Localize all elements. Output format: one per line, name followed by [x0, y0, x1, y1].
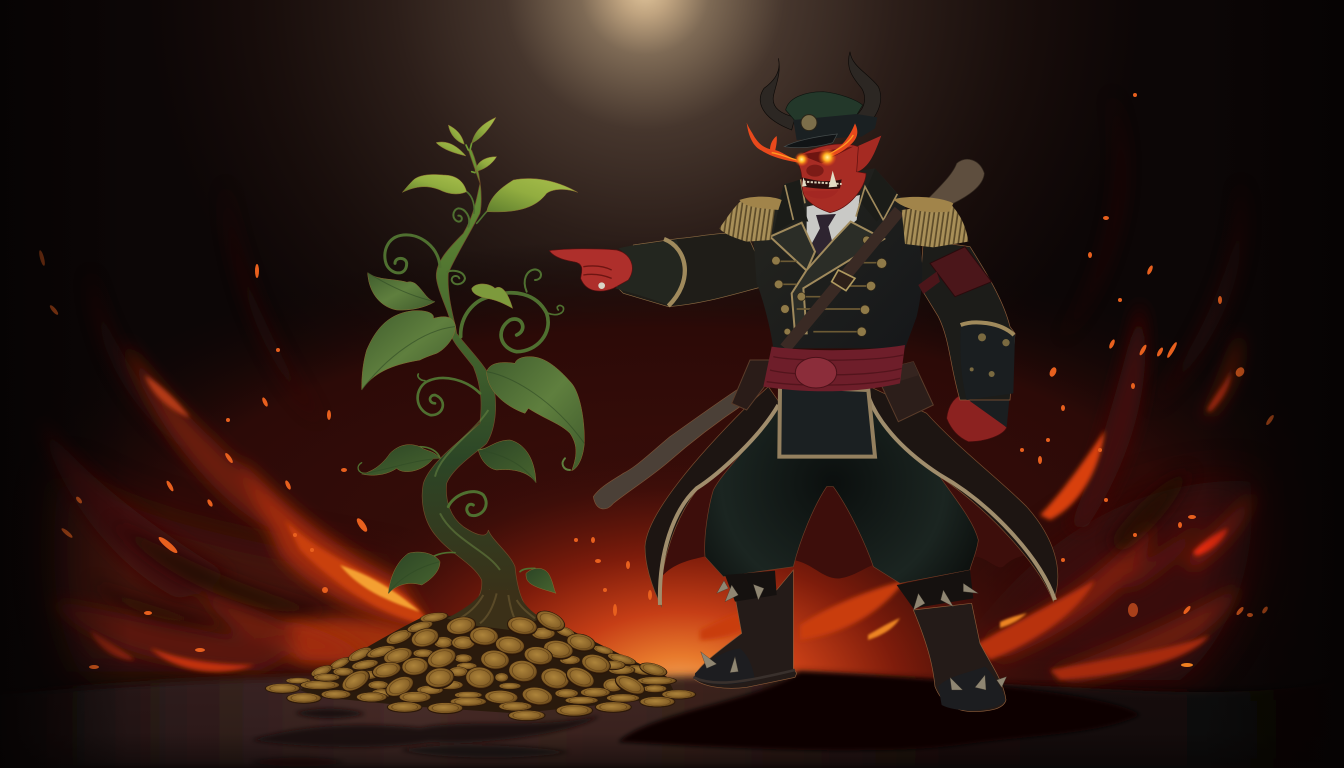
brow shadow	[797, 147, 853, 163]
lapels	[770, 223, 815, 271]
right collar	[862, 168, 898, 222]
plant roots	[447, 590, 542, 630]
lower right leaf	[478, 440, 536, 483]
ground	[0, 672, 1344, 768]
left collar edge	[785, 179, 805, 220]
lower left leaf	[362, 445, 440, 475]
baggy trousers	[705, 407, 978, 583]
cuff trim	[664, 239, 685, 306]
top left leaf	[402, 175, 467, 194]
sprout leaves	[436, 117, 497, 172]
peaked officer cap	[784, 92, 877, 148]
boot spikes	[701, 581, 764, 673]
horns	[760, 58, 795, 130]
torso coat	[753, 168, 922, 348]
background: right edge darkening	[1200, 0, 1344, 768]
large right leaf	[487, 357, 584, 471]
translucent cape behind legs	[662, 407, 1037, 578]
war club, lower end	[593, 390, 745, 509]
armband	[918, 247, 992, 297]
left collar	[773, 179, 808, 233]
shirt collar	[807, 195, 860, 252]
ground: coin pile shadows	[250, 709, 600, 766]
background: dark smoke bands crossing the flames	[90, 470, 1190, 626]
right collar edge	[856, 187, 897, 220]
background: horizon fire glow	[200, 380, 1160, 700]
tendrils	[358, 143, 570, 572]
background: dark red haze	[0, 240, 1344, 700]
large left leaf	[362, 311, 456, 390]
right coat tail	[867, 387, 1058, 602]
vine plant	[358, 117, 584, 620]
nose	[806, 165, 824, 177]
stem highlight strands	[435, 410, 517, 618]
small tendril leaf	[472, 284, 513, 308]
right boot	[897, 570, 1007, 712]
leaves	[362, 117, 584, 593]
right bracer, lower end	[960, 340, 1015, 427]
eye flames	[747, 123, 857, 163]
background: left fire body	[54, 470, 430, 672]
ground: demon cast shadow	[618, 672, 1140, 750]
background: right fire body	[980, 480, 1252, 680]
left coat tail	[645, 387, 780, 607]
left coat tail trim	[660, 405, 778, 605]
background: dark red flame streaks	[40, 300, 1255, 685]
background: ember sparks	[38, 93, 1275, 714]
leaf veins	[362, 273, 584, 593]
clenched right fist	[947, 395, 1007, 442]
boot spikes	[913, 583, 1007, 690]
demon lower body	[593, 340, 1058, 712]
right pouch	[875, 362, 933, 422]
upper left leaf	[368, 273, 435, 310]
coin pile	[265, 590, 696, 721]
background: low glow left of the coins	[260, 618, 420, 662]
red sash	[763, 345, 905, 391]
top right leaf	[487, 179, 578, 212]
necktie	[811, 214, 836, 258]
left boot	[693, 570, 797, 688]
pile mass	[300, 613, 677, 713]
base left leaf	[388, 552, 440, 593]
background: bright flame streaks	[90, 372, 1231, 680]
snarling mouth with fangs	[802, 171, 842, 199]
demon officer figure	[549, 52, 1058, 712]
background: fire core highlights	[340, 565, 1027, 640]
pointing arm	[617, 233, 770, 307]
base right leaf	[526, 568, 556, 593]
buttons with braid	[772, 236, 887, 336]
ground: fade to dark at the bottom	[0, 680, 1344, 768]
coins	[265, 607, 696, 721]
far arm	[920, 240, 1015, 400]
forearm bracer	[960, 322, 1015, 400]
left holster	[732, 360, 771, 410]
background: left edge darkening	[0, 0, 130, 768]
main stem	[422, 150, 538, 620]
right coat tail trim	[868, 397, 1055, 600]
neck and face	[797, 144, 866, 213]
background: spotlight from above	[0, 0, 1344, 560]
pointing arm cuff	[615, 240, 682, 305]
background: dim upper swirl streaks	[90, 90, 1244, 470]
demon upper body	[549, 52, 1015, 400]
pointed ear	[855, 136, 881, 173]
glowing eyes	[794, 148, 837, 167]
gold epaulettes	[719, 197, 968, 247]
demon head	[747, 52, 881, 213]
strap buckle	[832, 270, 855, 291]
front apron panel	[779, 387, 875, 457]
pointing hand	[549, 249, 632, 291]
war club, upper end	[928, 159, 984, 203]
diagonal leather strap	[785, 211, 899, 348]
